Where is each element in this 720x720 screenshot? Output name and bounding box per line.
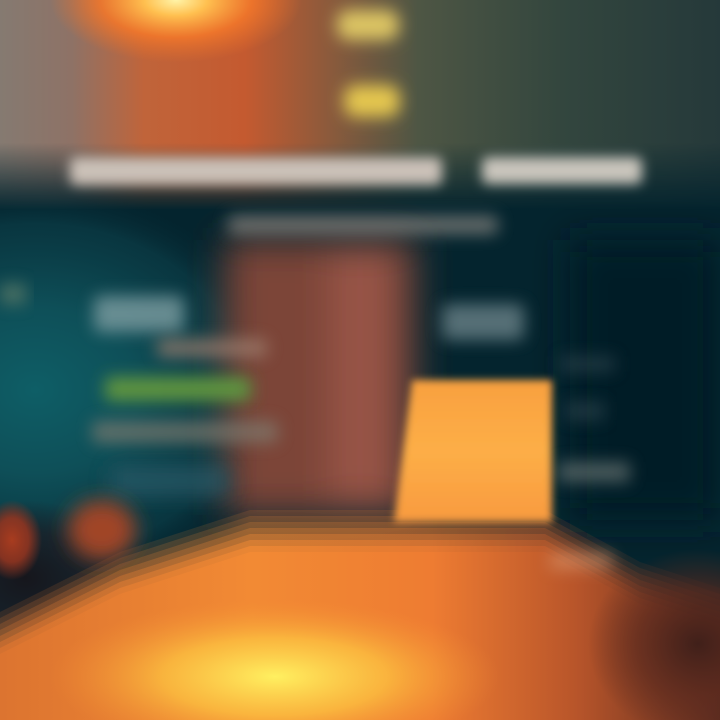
panel: left text column	[92, 296, 278, 496]
icon: red sphere left	[0, 500, 60, 580]
floor: orange surface	[0, 510, 720, 720]
icon: upper yellow light	[337, 10, 399, 40]
left text row 1	[157, 339, 267, 357]
left text row 2	[92, 421, 278, 443]
right text row 3	[558, 462, 630, 482]
right text row on floor edge	[550, 553, 612, 569]
panel: glowing orange card	[394, 380, 552, 522]
right heading	[442, 304, 524, 340]
bottom-left dark corner	[0, 500, 170, 630]
icon: red sphere right	[68, 500, 136, 560]
background: left teal panel	[0, 170, 300, 590]
background: upper warm band	[0, 0, 720, 210]
right text row 2	[565, 402, 605, 420]
panel: right text column	[442, 304, 630, 482]
floor: bottom-right shadow	[500, 530, 720, 720]
title: blurred heading	[70, 157, 642, 185]
background: right dark area	[570, 240, 720, 520]
left heading	[94, 296, 184, 332]
left edge label	[0, 284, 26, 304]
background: central brick column	[225, 240, 415, 515]
floor: yellow hot spot	[50, 565, 500, 720]
left text row 3	[110, 466, 230, 496]
subtitle: blurred text	[228, 216, 498, 234]
glow: top light	[50, 0, 302, 125]
left green highlight row	[105, 377, 251, 401]
right text row 1	[560, 356, 615, 372]
icon: lower yellow light	[344, 85, 400, 117]
